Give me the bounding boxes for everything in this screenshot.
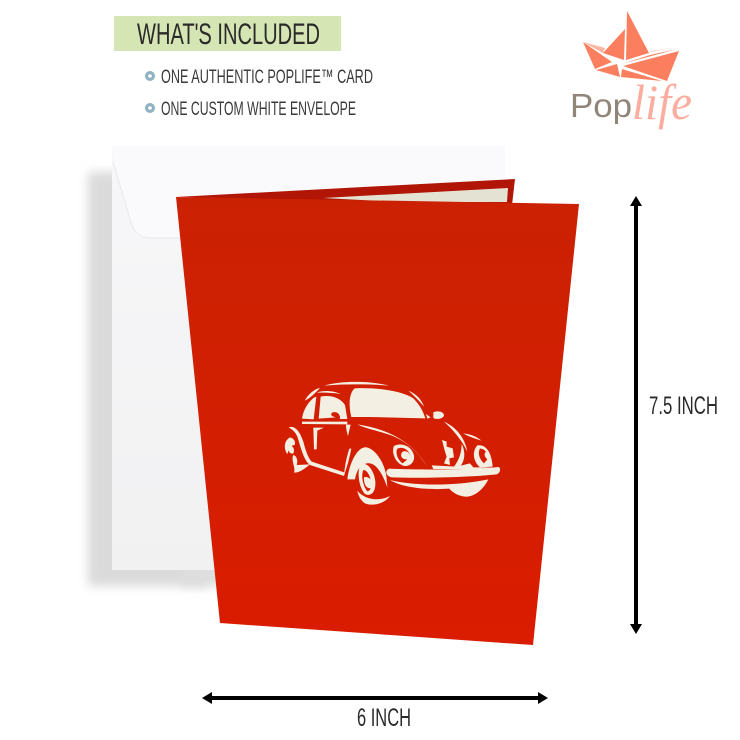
card front — [176, 197, 579, 645]
logo: Poplife boat — [570, 11, 692, 130]
heading: what's included: WHAT'S INCLUDED — [137, 18, 320, 51]
logo: Poplife boat: Pop — [570, 87, 632, 124]
envelope — [112, 146, 505, 570]
list: included items: ONE CUSTOM WHITE ENVELOPE — [161, 98, 356, 120]
arrow: height dimension — [630, 196, 642, 634]
list: included items — [147, 66, 373, 120]
card back panel — [176, 179, 515, 205]
logo: Poplife boat: life — [632, 74, 692, 130]
label: 6 inch: 6 INCH — [357, 704, 411, 732]
icon: cut-out car — [285, 382, 500, 505]
list: included items: ONE AUTHENTIC POPLIFE™ CARD — [161, 66, 373, 88]
heading: what's included — [114, 16, 341, 51]
arrow: width dimension — [202, 692, 548, 704]
envelope shadow — [88, 172, 208, 586]
